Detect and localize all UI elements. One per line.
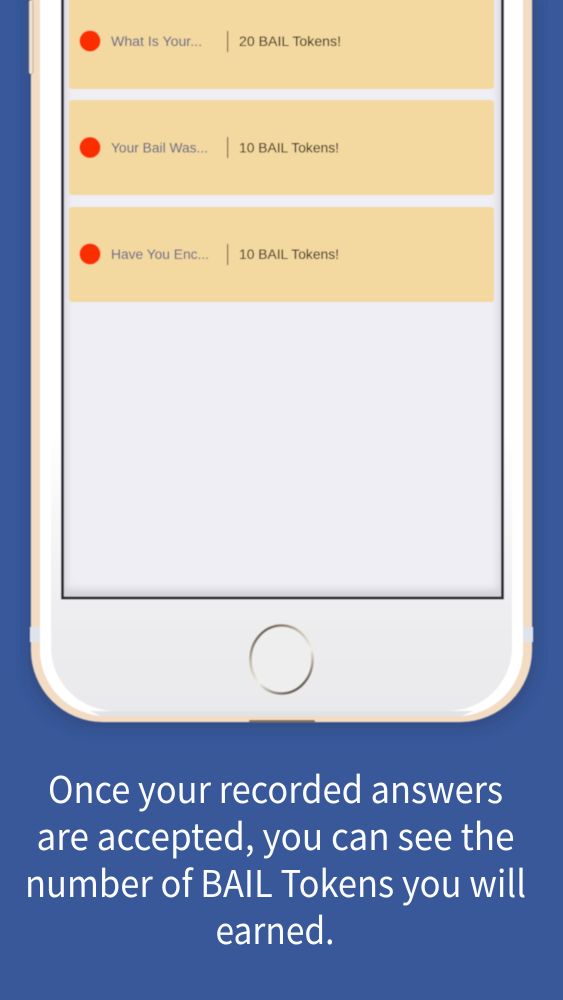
phone mockup: [26, 0, 537, 729]
caption: number of BAIL Tokens you will: [25, 854, 526, 908]
caption: are accepted, you can see the: [36, 807, 514, 861]
token reward: 20 BAIL Tokens!: [239, 34, 341, 49]
token reward: 10 BAIL Tokens!: [239, 140, 339, 156]
status dot: [80, 244, 100, 264]
screen frame: [62, 0, 502, 598]
divider: [227, 137, 228, 158]
phone white bezel: [40, 0, 523, 716]
divider: [227, 31, 228, 52]
bottom edge band: [90, 711, 473, 716]
caption: [25, 760, 526, 955]
antenna bands: [30, 627, 533, 642]
caption: Once your recorded answers: [48, 760, 503, 814]
row: have you enc: [69, 207, 494, 302]
question label: Your Bail Was...: [111, 140, 208, 156]
divider: [227, 244, 228, 265]
phone gold frame: [31, 0, 532, 722]
status dot: [80, 30, 100, 52]
phone lower face: [51, 430, 512, 711]
question label: What Is Your...: [111, 34, 202, 49]
row card: [69, 100, 494, 195]
row card: [69, 0, 494, 89]
side button: [29, 0, 33, 74]
row: what is your: [69, 0, 494, 89]
phone shadow: [26, 0, 537, 729]
caption: earned.: [216, 901, 334, 955]
row: your bail was: [69, 100, 494, 195]
screen edge shade: [60, 0, 505, 600]
status dot: [80, 137, 100, 158]
question label: Have You Enc...: [111, 247, 209, 262]
screen background: [62, 0, 502, 598]
token reward: 10 BAIL Tokens!: [239, 247, 339, 262]
home button: [250, 626, 312, 694]
bottom port: [249, 720, 315, 722]
row card: [69, 207, 494, 302]
screen: [60, 0, 505, 600]
